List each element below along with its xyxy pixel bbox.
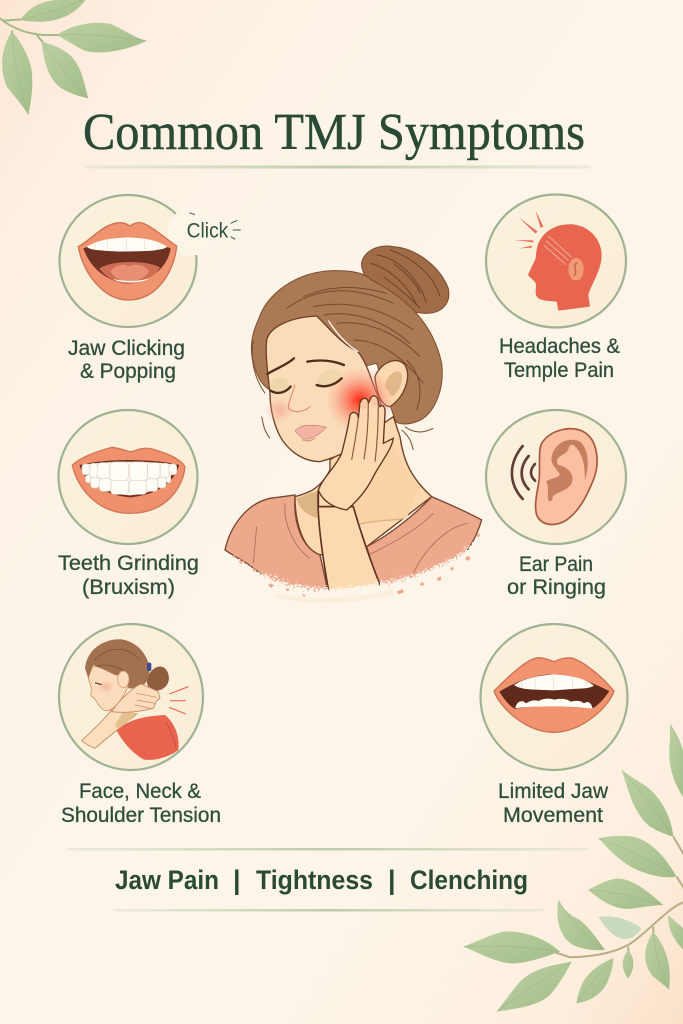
pain glow — [325, 367, 395, 433]
symptom: teeth grinding — [58, 410, 199, 599]
title: Common TMJ Symptoms — [83, 104, 585, 161]
shirt — [225, 495, 482, 601]
summary strip: jaw pain, tightness, clenching: Jaw Pain — [115, 865, 219, 895]
summary strip: jaw pain, tightness, clenching: Clenching — [410, 865, 528, 895]
summary strip: jaw pain, tightness, clenching: | — [233, 865, 241, 895]
summary strip: jaw pain, tightness, clenching: | — [388, 865, 396, 895]
symptom: ear pain: or Ringing — [507, 576, 606, 599]
icon: clenched teeth — [72, 447, 185, 513]
symptom: headaches — [486, 194, 626, 382]
cheek blush — [265, 397, 293, 423]
icon: open mouth with click: Click — [187, 218, 229, 242]
label: Limited Jaw — [498, 780, 609, 803]
label: Jaw Clicking — [68, 337, 185, 360]
icon: partly open mouth — [494, 658, 614, 732]
neck and chest — [295, 417, 432, 555]
divider: lower bottom rule — [115, 909, 543, 912]
label: Teeth Grinding — [58, 552, 199, 575]
summary strip: jaw pain, tightness, clenching: Tightness — [256, 865, 373, 895]
icon: open mouth with click — [78, 208, 241, 300]
arm and hand — [318, 396, 393, 598]
symptom: ear pain — [486, 410, 626, 599]
symptom: limited jaw movement — [480, 624, 628, 827]
summary strip: jaw pain, tightness, clenching — [115, 865, 528, 895]
symptom: jaw clicking — [60, 195, 241, 383]
leaves: bottom right branch — [463, 723, 683, 1012]
face — [266, 316, 383, 462]
symptom: face neck shoulder tension — [59, 624, 221, 827]
mouth — [295, 425, 327, 441]
symptom: teeth grinding: (Bruxism) — [82, 576, 175, 599]
divider: upper bottom rule — [68, 848, 588, 850]
leaves: top left sprig — [0, 0, 147, 115]
hair — [251, 246, 449, 450]
torn paint edge — [210, 520, 507, 623]
eyes and brows — [267, 358, 344, 412]
icon: woman holding neck — [82, 639, 188, 760]
symptom: headaches: Temple Pain — [504, 359, 614, 382]
symptom: limited jaw movement: Movement — [503, 804, 603, 827]
ear — [375, 361, 408, 407]
icon: head with temple pain — [515, 210, 602, 311]
icon: ear with sound waves — [512, 429, 597, 524]
label: Face, Neck & — [79, 780, 201, 803]
symptom: jaw clicking: & Popping — [80, 360, 176, 383]
central illustration: woman holding jaw — [210, 246, 507, 623]
symptom: face neck shoulder tension: Shoulder Tension — [61, 804, 221, 827]
label: Ear Pain — [519, 553, 593, 576]
label: Headaches & — [499, 335, 620, 358]
